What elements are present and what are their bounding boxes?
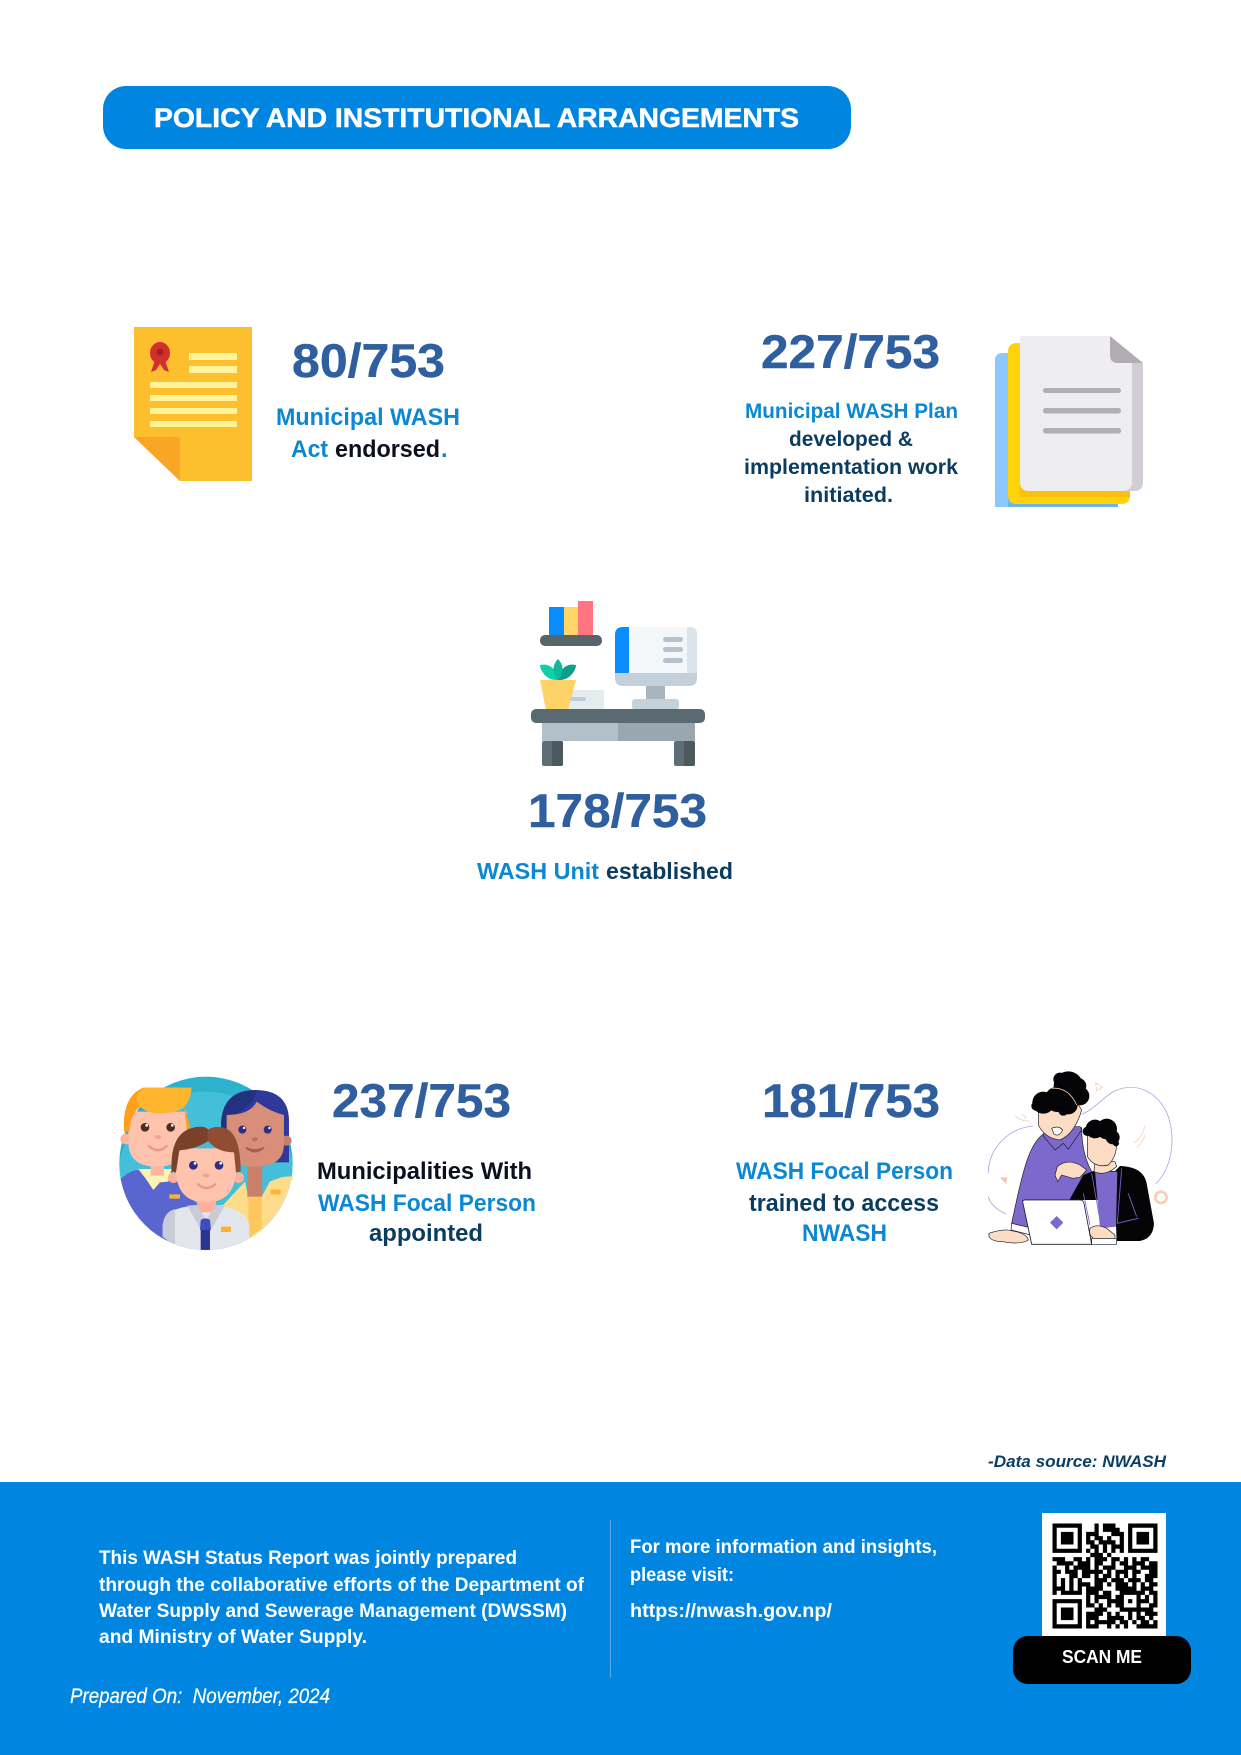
caption: WASH plan developed: implementation work (744, 456, 958, 479)
panel: footer (0, 1482, 1241, 1755)
text: more information: https://nwash.gov.np/ (630, 1600, 833, 1622)
caption: focal person trained: WASH Focal Person (736, 1158, 953, 1185)
caption: municipal WASH act endorsed: Municipal WASH (276, 404, 460, 431)
caption: WASH plan developed: initiated. (804, 484, 893, 507)
caption: municipalities with focal person: WASH Focal Person (318, 1190, 536, 1217)
icon: certificate document (134, 327, 252, 481)
text: report credits (99, 1547, 584, 1648)
icon: two people at laptop (988, 1071, 1172, 1244)
icon: three people (119, 1076, 293, 1250)
caption: municipal WASH act endorsed: endorsed (335, 436, 440, 463)
scan me button (1013, 1636, 1191, 1684)
caption: municipal WASH act endorsed: . (441, 436, 448, 463)
caption: municipalities with focal person (317, 1158, 536, 1247)
stat: 80/753: 80/753 (292, 334, 445, 387)
stat: 181/753: 181/753 (762, 1074, 940, 1127)
panel: focal person appointed (119, 1076, 535, 1250)
text: report credits: through the collaborative efforts of the Department of (99, 1574, 584, 1596)
text: more information: please visit: (630, 1564, 734, 1586)
icon: stacked documents (995, 336, 1143, 507)
stat: 227/753: 227/753 (761, 325, 940, 378)
text: report credits: Water Supply and Sewerage Management (DWSSM) (99, 1600, 567, 1622)
stat: 178/753: 178/753 (528, 784, 707, 837)
caption: focal person trained (736, 1158, 953, 1247)
stat: 237/753: 237/753 (332, 1074, 511, 1127)
caption: municipalities with focal person: Municipalities With (317, 1158, 532, 1185)
title banner (103, 86, 851, 149)
caption: WASH plan developed: Municipal WASH Plan (745, 400, 958, 423)
caption: municipal WASH act endorsed: Act (291, 436, 328, 463)
text: report credits: This WASH Status Report was jointly prepared (99, 1547, 517, 1569)
icon: office desk (531, 601, 705, 766)
caption: WASH plan developed (744, 400, 958, 507)
panel: focal person trained (736, 1071, 1172, 1247)
text: prepared date: Prepared On: November, 2024 (70, 1685, 330, 1708)
caption: WASH unit established (477, 858, 733, 884)
panel: municipal WASH act (134, 327, 460, 481)
text: more information: For more information and insights, (630, 1536, 937, 1558)
data source note: -Data source: NWASH (988, 1452, 1167, 1471)
caption: focal person trained: NWASH (802, 1220, 887, 1247)
caption: focal person trained: trained to access (749, 1190, 939, 1217)
text: report credits: and Ministry of Water Supply. (99, 1626, 367, 1648)
caption: WASH unit established: established (606, 858, 733, 884)
caption: municipal WASH act endorsed (276, 404, 460, 463)
text: more information (630, 1536, 937, 1622)
scan me button: SCAN ME (1062, 1647, 1142, 1667)
panel: municipal WASH plan (744, 325, 1143, 507)
QR code (1042, 1513, 1166, 1637)
title banner: POLICY AND INSTITUTIONAL ARRANGEMENTS (154, 103, 799, 133)
caption: municipalities with focal person: appointed (369, 1220, 483, 1247)
caption: WASH plan developed: developed & (789, 428, 913, 451)
caption: WASH unit established: WASH Unit (477, 858, 599, 884)
panel: WASH unit (477, 601, 733, 884)
